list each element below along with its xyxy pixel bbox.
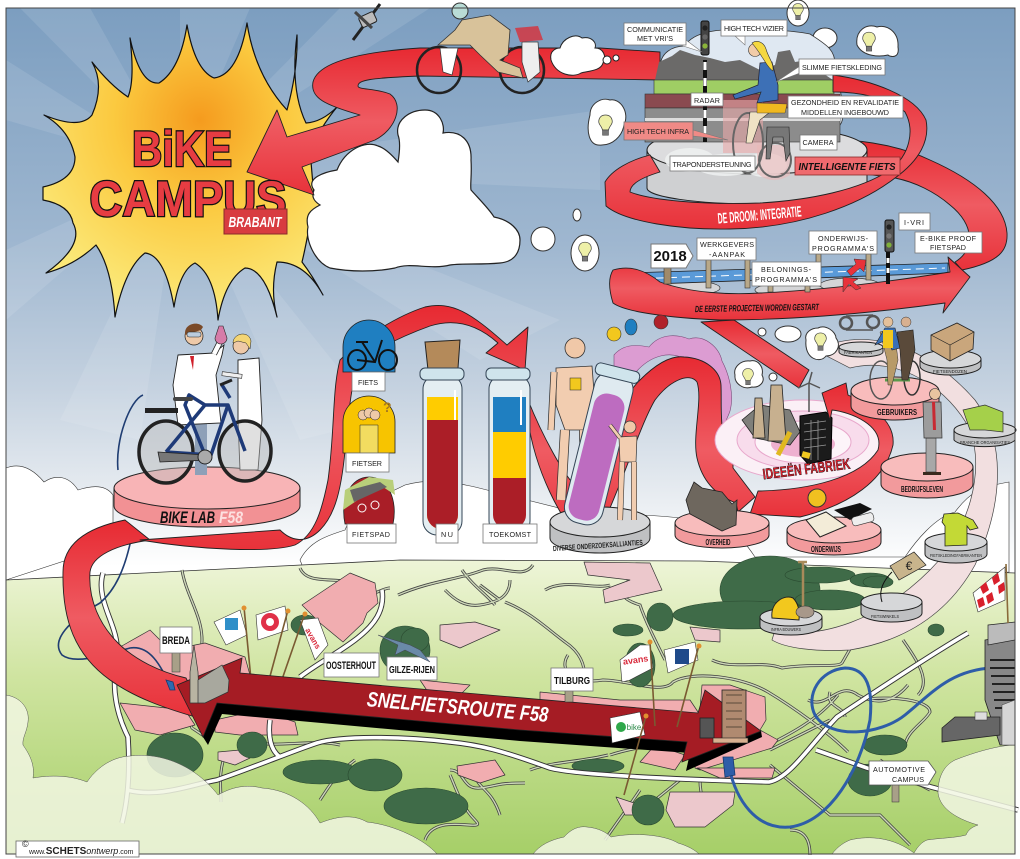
label communicatie [624,23,702,52]
platform: fietswinkels: FIETSWINKELS [871,614,899,619]
label beloningsprogramma: PROGRAMMA'S [755,275,817,284]
rider [733,62,778,103]
label fietser [346,453,389,472]
flag: avans Breda: avans [303,626,323,651]
bike wheels [139,421,271,483]
blue cycle path [627,263,948,285]
ribbon: dream integration loop [605,75,927,229]
idea factory [742,372,832,464]
label camera: CAMERA [802,138,834,147]
BRABANT tag [224,209,287,234]
ideeen fabriek title: IDEEËN FABRIEK [762,456,851,483]
Breda church [190,645,229,703]
circle: fietser: ? [383,399,392,415]
main white road [101,573,1018,823]
platform: gebruikers [851,317,939,420]
highlighted infra zone [723,100,763,153]
label trapondersteuning: TRAPONDERSTEUNING [672,160,752,169]
logo: Bike Campus Brabant [90,121,287,234]
city sign: Oosterhout: OOSTERHOUT [326,660,376,672]
automotive campus sign: AUTOMOTIVE [873,765,925,774]
ribbon: bike lab down to Breda [63,520,205,716]
businessman [923,388,942,475]
riders [880,328,898,385]
colored dots [607,327,621,341]
city sign: Tilburg [551,668,593,702]
secondary roads [182,565,930,855]
flag: tu logo [664,642,702,727]
flag: D-bike [610,712,648,795]
circle: fietser [343,396,395,453]
scientists [173,324,262,475]
Eindhoven towers [700,690,748,743]
flag: hexagon logo [256,606,290,691]
traffic light with radar pole [701,21,709,142]
label nu [436,524,458,543]
platform: bike lab: F58 [219,508,243,527]
copyright badge: © [22,839,29,849]
first projects text: DE EERSTE PROJECTEN WORDEN GESTART [695,302,820,314]
platform: fietsendozen: FIETSENDOZEN [933,369,967,374]
ribbon: long curve with arrow [835,140,1007,270]
i-vri traffic light [885,220,894,284]
pale bottom clouds [6,695,1015,854]
green landscape [6,560,1015,854]
label beloningsprogramma [752,262,821,286]
label fietspad: FIETSPAD [352,530,390,539]
big route arrow snelfietsroute [177,658,762,771]
platform: fabrikanten [839,315,883,357]
price tag [890,552,926,580]
green map [963,405,1003,432]
flag pole group Breda [214,606,328,691]
label fiets [352,372,385,391]
platform: overheid [675,482,769,548]
platform: bike lab [114,467,300,527]
crash test dummy large [551,338,595,500]
satellite [353,4,380,40]
bulb cloud left [588,99,626,145]
crash test dummy small [610,421,637,520]
label intelligente fiets: INTELLIGENTE FIETS [798,162,896,173]
dream labels [624,20,903,175]
automotive campus sign: CAMPUS [892,775,924,784]
platform: infra bouwers [760,562,822,635]
label nu: NU [441,530,453,539]
label gezondheid: GEZONDHEID EN REVALIDATIE [791,98,899,107]
BRABANT tag: BRABANT [228,214,283,231]
label fietspad [347,524,396,543]
pink smoke [614,336,761,463]
arrow shadow [177,685,762,771]
label i-vri: I-VRI [904,218,924,227]
label fiets: FIETS [358,378,378,387]
platform: overheid: OVERHEID [706,538,731,547]
bulb in oval bottom [571,235,599,271]
label werkgevers aanpak [697,238,756,260]
ribbon: first projects with arrow [610,257,970,320]
platform: onderwijs: ONDERWIJS [811,545,841,554]
copyright badge: www.SCHETSontwerp.com [28,846,134,857]
tower plaza [942,717,1000,742]
red up and down arrows [843,259,866,292]
city sign: Breda [160,627,192,672]
2018 sign [651,244,693,284]
wheels [417,47,544,93]
label onderwijsprogramma: PROGRAMMA'S [812,244,874,253]
label toekomst: TOEKOMST [489,530,532,539]
label werkgevers aanpak: -AANPAK [709,250,745,259]
platform: fietswinkels: € [906,559,913,573]
city sign: Tilburg: TILBURG [554,676,590,687]
label intelligente fiets [795,157,900,175]
exoskeleton [766,127,790,161]
ribbon: bike lab up to test tubes [140,305,528,550]
label trapondersteuning [670,156,755,171]
circle: fiets [343,320,397,372]
label beloningsprogramma: BELONINGS- [761,265,812,274]
label toekomst [483,524,537,543]
infographic canvas: DE DROOM: INTEGRATIE [717,203,802,228]
dream pedestal [647,126,867,204]
platform: branche organisaties [954,405,1016,447]
dark blue plug [166,680,175,690]
circle: fietspad [343,477,395,524]
platform: bedrijfsleven [881,388,973,498]
factory building [742,405,800,445]
thought bubbles and idea bulbs [531,0,898,271]
bike frame [166,385,245,455]
city sign: Gilze-Rijen [387,657,437,680]
label e-bike proof fietspad: E-BIKE PROOF [920,234,977,243]
white horizon clouds [6,466,1009,592]
cork [425,340,460,370]
label high tech vizier: HIGH TECH VIZIER [724,24,784,33]
electric bike [139,380,271,483]
rider body [438,15,523,78]
female scientist [222,334,262,470]
shovel [798,562,807,612]
government building [686,482,737,531]
cardboard box [931,323,974,361]
blue plug [723,757,735,777]
ground map [6,556,1018,855]
bubble small [573,209,581,221]
ribbon: top, arrow into burst [247,48,660,195]
pale curved ribbon to industry partners [772,340,998,651]
bubble dots [758,328,766,336]
flags Tilburg [610,640,702,795]
label gezondheid [788,96,903,118]
flag: avans Tilburg [620,640,655,726]
label fietser: FIETSER [352,459,382,468]
blue charging cable [729,668,992,827]
pale cloud at base [665,148,787,177]
big white cloud [307,110,520,271]
platform: diverse onderzoeksallianties [550,507,650,553]
pedestals under first projects [640,278,880,297]
label high tech infra [624,122,728,140]
automotive campus sign [869,761,936,802]
label onderwijsprogramma: ONDERWIJS- [818,234,869,243]
purple test tube [558,362,641,529]
tandem bike [870,317,920,399]
yellow shirt [942,513,978,546]
campus tower building [942,622,1015,745]
test tube: toekomst [486,368,530,535]
label e-bike proof fietspad [915,232,982,253]
wheels [733,113,791,177]
pink city areas [120,573,778,783]
bulb top [787,0,809,26]
pink swirl [715,400,891,480]
globe [808,489,826,507]
BIKE heading: BiKE [132,121,232,177]
label high tech infra: HIGH TECH INFRA [627,127,689,136]
cyclist on top ribbon [417,3,544,93]
brabant flag [973,564,1008,623]
bulb cloud right [857,26,898,57]
label slimme fietskleding [776,59,885,82]
platform: diverse onderzoeksallianties: DIVERSE ONDERZOEKSALLIANTIES [553,538,643,553]
starburst [43,23,356,320]
sign posts [706,254,871,292]
gears [840,315,879,330]
bubble medium [531,227,555,251]
route title: SNELFIETSROUTE F58 [366,688,549,727]
label gezondheid: MIDDELLEN INGEBOUWD [801,108,889,117]
platform: onderwijs [787,489,881,555]
label camera [800,135,837,150]
ribbon: S curve to factory [528,357,755,545]
label werkgevers aanpak: WERKGEVERS [700,240,754,249]
fighter jet [378,635,430,662]
flag: D-bike: bike [627,723,642,732]
bike lab text: BIKE LAB [160,508,215,527]
small bubbles near factory [607,315,838,388]
ribbon down to idea factory [701,320,809,388]
yellow helmet [772,597,799,620]
dark blue cable from bike lab [58,395,170,685]
flag: avans Tilburg: avans [622,653,649,667]
sun rays [6,8,600,440]
test tube: nu [420,340,464,535]
wind turbine [798,372,820,412]
label communicatie: MET VRI'S [637,34,673,43]
intelligent bike with rider [723,41,791,180]
yellow pipe [778,432,790,455]
platform: gebruikers: GEBRUIKERS [877,408,917,417]
label slimme fietskleding: SLIMME FIETSKLEDING [802,63,882,72]
label high tech vizier [721,20,787,45]
arrow body [177,658,761,762]
bulb cloud factory right [806,327,838,360]
black office block [800,412,832,464]
platform: fietswinkels [861,552,926,622]
book and mortarboard [806,512,846,537]
male scientist [173,324,227,475]
platform: fietskleding fabrikanten: FIETSKLEDINGFABRIKANTEN [930,553,982,558]
label i-vri [899,213,930,230]
dream scene cloud [645,30,843,177]
platform: infra bouwers: INFRA BOUWERS [771,627,801,632]
CAMPUS heading: CAMPUS [90,171,286,227]
platform: fabrikanten: FABRIKANTEN [844,350,872,355]
skyline [655,50,833,80]
platform: fietsendozen [920,323,981,375]
city sign: Gilze-Rijen: GILZE-RIJEN [389,665,435,676]
flag: NHTV [214,606,252,690]
small cloud by cyclist [551,36,619,75]
label radar [691,93,723,106]
pale city areas [218,562,735,827]
label e-bike proof fietspad: FIETSPAD [930,243,966,252]
platform: bedrijfsleven: BEDRIJFSLEVEN [901,485,943,494]
platform: branche organisaties: BRANCHE ORGANISATIES [960,440,1010,445]
bulb cloud factory left [735,361,763,388]
forests [147,556,944,825]
city sign: Breda: BREDA [162,635,190,647]
label onderwijsprogramma [809,231,877,254]
platform: fietskleding fabrikanten [925,513,987,563]
copyright badge [16,839,139,857]
2018 sign: 2018 [653,248,687,265]
small cloud [813,28,837,48]
city sign: Oosterhout [324,653,379,677]
label communicatie: COMMUNICATIE [627,25,683,34]
label radar: RADAR [694,96,720,105]
ribbon: around the factory [750,383,893,517]
